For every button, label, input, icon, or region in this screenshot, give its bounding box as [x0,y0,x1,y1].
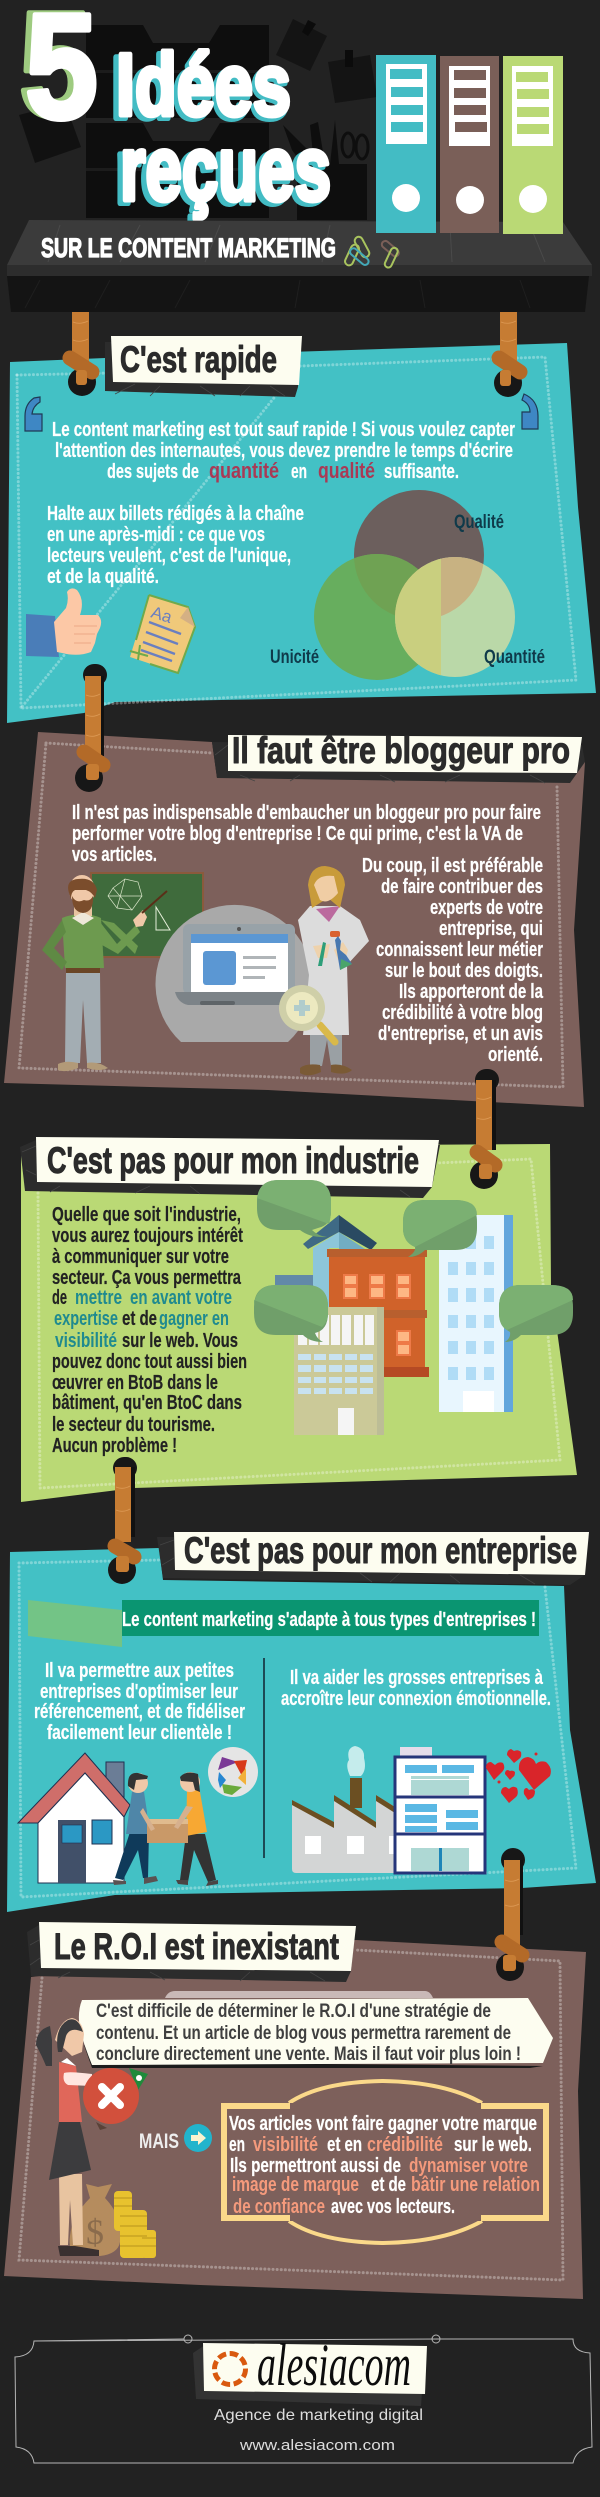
callout text: de confiance [233,2195,325,2218]
building: blue-gray back [275,1275,315,1287]
side text: en une après-midi : ce que vos [47,523,265,546]
body text: expertise [54,1307,118,1330]
icon: red cross circle [83,2068,139,2124]
icon: colorful lens [208,1747,258,1797]
panel: c'est pas pour mon industrie [20,1137,577,1502]
rope: desk right to panel 1 [499,312,520,386]
building: beige [294,1307,384,1435]
icon: document: Aa [149,603,175,627]
desk [7,220,592,312]
wordmark: alesiacom [257,2332,411,2398]
logo tag [193,2332,427,2406]
body text: et de [122,1307,157,1330]
intro text: des sujets de [107,460,199,483]
icon: closing quote [522,394,538,429]
subtitle: SUR LE CONTENT MARKETING [41,233,336,263]
callout text: et en [327,2133,362,2156]
body text: œuvrer en BtoB dans le [52,1371,218,1394]
callout text: avec vos lecteurs. [331,2195,455,2218]
right text [362,854,543,1066]
binder: teal [376,55,436,233]
right text: entreprise, qui [439,917,543,940]
side text: lecteurs veulent, c'est de l'unique, [47,544,291,567]
right text: Du coup, il est préférable [362,854,543,877]
right text: d'entreprise, et un avis [378,1022,543,1045]
binders [376,55,563,234]
left column text: entreprises d'optimiser leur [40,1680,238,1703]
ropes linking the panels [70,312,523,1971]
label: qualité: Qualité [454,512,504,533]
callout text: en [229,2133,245,2156]
callout text: bâtir une relation [411,2173,540,2196]
header illustration: shelves and wall notes [19,19,377,220]
intro text [52,418,515,483]
body text: en avant votre [130,1286,232,1309]
banner [28,1600,539,1647]
word: reçues: reçues [120,118,331,220]
body text: gagner en [159,1307,229,1330]
illustration: house [18,1753,130,1883]
speech bubble: middle right [499,1285,573,1342]
hole [496,1953,524,1981]
binder: brown [440,56,499,233]
body text: à communiquer sur votre [52,1245,229,1268]
icon: thumbs up [26,588,101,657]
hole [75,764,103,792]
right text: crédibilité à votre blog [382,1001,543,1024]
hole [470,1161,498,1189]
speech bubble: C'est difficile de déterminer le R.O.I d'une stratégie de [96,2001,491,2022]
body text: de [52,1286,67,1309]
left column text: facilement leur clientèle ! [47,1721,232,1744]
coins [114,2191,156,2258]
icon: document [130,595,195,673]
right text: de faire contribuer des [381,875,543,898]
heading tag [20,1137,440,1198]
building: orange [327,1249,429,1377]
hole [494,369,522,397]
side text: et de la qualité. [47,565,159,588]
speech bubble [79,1991,553,2068]
heading tag: Le R.O.I est inexistant [54,1926,339,1967]
icon: arrow [184,2124,212,2152]
hole [68,368,96,396]
rope: panel 2 to panel 3 [475,1069,499,1179]
heading tag: C'est pas pour mon industrie [47,1140,419,1181]
side text [47,502,304,588]
illustration: teacher [42,875,167,1071]
body text: visibilité [55,1329,117,1352]
intro text: vos articles. [72,843,157,866]
footer frame [15,2339,592,2463]
website: www.alesiacom.com [239,2437,395,2454]
building: light blue house [303,1215,377,1310]
frame ring [432,2335,440,2343]
binder: green [503,56,563,234]
heading tag [157,1530,589,1585]
intro text: suffisante. [384,460,459,483]
frame ring [184,2335,192,2343]
icon: paperclips [344,235,400,269]
body text: secteur. Ça vous permettra [52,1266,241,1289]
heading tag: C'est rapide [120,339,277,380]
rope: desk left to panel 1 [70,312,92,385]
illustration: office building [394,1747,486,1873]
illustration: woman with money [36,2018,156,2258]
panel: c'est rapide [7,336,596,723]
left column text: Il va permettre aux petites [45,1659,234,1682]
body text: le secteur du tourisme. [52,1413,215,1436]
callout text [229,2112,540,2218]
label: quantité: Quantité [484,647,545,668]
left column text: référencement, et de fidéliser [34,1700,245,1723]
label: mais: MAIS [139,2130,179,2153]
icon: hearts [486,1749,551,1803]
word: Idées: Idées [111,38,289,137]
body text: mettre [75,1286,122,1309]
panel: c'est pas pour mon entreprise [7,1530,596,1912]
body text: vous aurez toujours intérêt [52,1224,243,1247]
callout text: sur le web. [454,2133,532,2156]
icon: opening quote [25,397,42,431]
rope: panel 4 to panel 5 [502,1860,523,1971]
body text: Aucun problème ! [52,1434,177,1457]
callout text: visibilité [253,2133,318,2156]
footer [15,2332,592,2463]
panel: le r.o.i est inexistant [4,1922,586,2299]
illustration: two men carrying box [113,1772,218,1886]
icon: magnifier [279,985,335,1042]
speech bubble: top right [403,1200,477,1257]
blackboard [90,872,204,958]
right text: connaissent leur métier [376,938,543,961]
callout text: et de [371,2173,406,2196]
illustration: laptop on gray circle [156,905,313,1042]
body text: sur le web. Vous [122,1329,238,1352]
money bag: $ [86,2212,104,2252]
title: 5 Idées reçues [19,0,331,223]
right text: sur le bout des doigts. [385,959,543,982]
right text: experts de votre [430,896,543,919]
intro text: qualité [318,458,375,483]
illustration: buildings [254,1180,573,1435]
hole [108,1556,136,1584]
callout text: Ils permettront aussi de [230,2154,401,2177]
venn diagram [270,490,545,680]
body text: pouvez donc tout aussi bien [52,1350,247,1373]
callout frame [224,2081,546,2243]
body text: Quelle que soit l'industrie, [52,1203,241,1226]
rope: panel 1 to panel 2 [83,664,107,780]
word: reçues: reçues [115,121,327,223]
right text: Ils apporteront de la [399,980,543,1003]
illustration: factory [292,1746,395,1873]
building: tall blue [439,1215,513,1412]
hole [501,1848,525,1872]
speech bubble: middle left [254,1285,328,1342]
money bag [70,2184,121,2256]
illustration: scientist [298,866,369,1075]
heading tag [27,1922,356,1982]
callout text: dynamiser votre [409,2154,528,2177]
body text: bâtiment, qu'en BtoC dans [52,1391,242,1414]
heading tag [105,336,302,397]
word: Idées: Idées [116,35,291,134]
right text: orienté. [488,1043,543,1066]
left column text [34,1659,245,1744]
icon: dashed circle [214,2354,246,2384]
intro text: quantité [209,458,279,483]
rope: panel 3 to panel 4 [113,1457,137,1572]
body text [52,1203,247,1457]
label: unicité: Unicité [270,647,319,668]
tagline: Agence de marketing digital [214,2407,423,2424]
callout text: crédibilité [367,2133,443,2156]
speech bubble: top left [257,1180,331,1237]
intro text: en [291,460,307,483]
right column text [281,1666,551,1710]
intro text [72,801,541,866]
side text: Halte aux billets rédigés à la chaîne [47,502,304,525]
callout text: image de marque [232,2173,359,2196]
panel: il faut être bloggeur pro [4,730,585,1107]
